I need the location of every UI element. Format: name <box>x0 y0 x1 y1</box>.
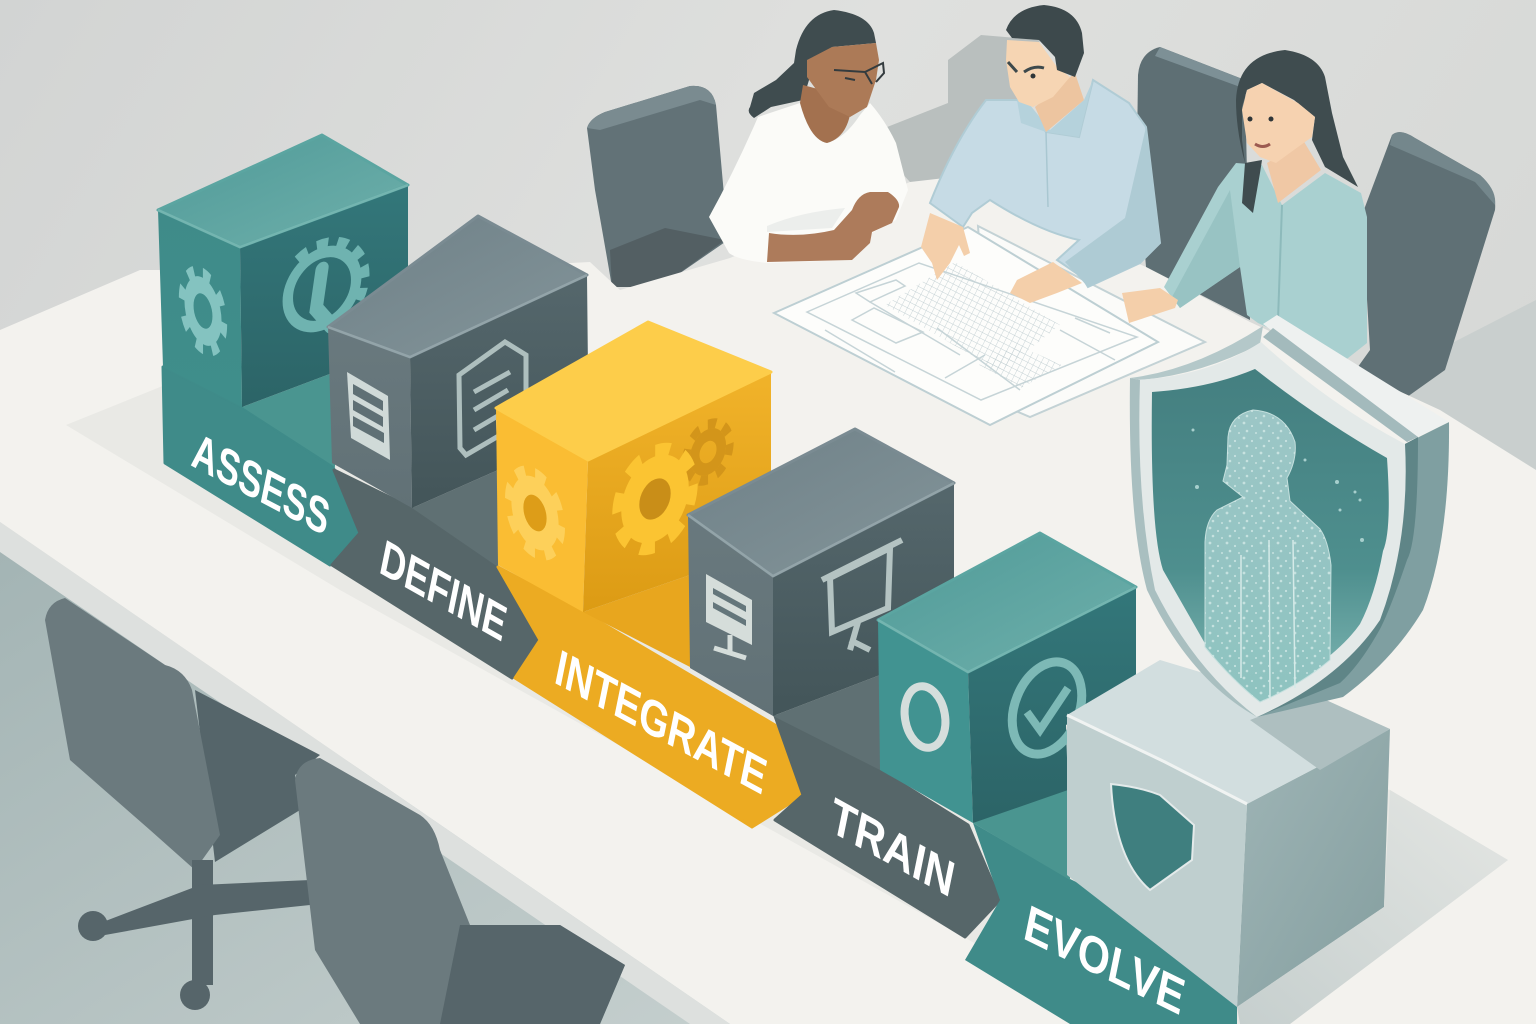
base label <box>332 470 540 678</box>
person: woman with glasses <box>709 10 908 263</box>
person: man in blue shirt <box>921 5 1160 303</box>
shadow on table right of pedestal <box>1237 790 1508 1024</box>
base label <box>163 367 360 565</box>
face <box>1006 40 1070 107</box>
icon: presentation board <box>822 540 902 650</box>
chair: behind man and woman <box>1137 47 1250 320</box>
label: train: TRAIN <box>826 788 959 909</box>
silver pedestal block <box>1067 660 1390 1007</box>
person: woman with long hair <box>1122 50 1367 362</box>
neck <box>1035 73 1084 132</box>
shield with person <box>1130 315 1449 717</box>
neck <box>1267 140 1321 203</box>
label: define: DEFINE <box>376 530 511 653</box>
chair: far right <box>1350 132 1495 402</box>
step 3: integrate block <box>496 322 803 827</box>
floor lower left <box>0 540 760 1024</box>
shirt <box>930 80 1160 287</box>
icon: ring <box>900 683 950 751</box>
table front edge <box>0 522 730 1024</box>
shadow under blocks <box>66 385 1508 1024</box>
shield front <box>1132 342 1406 717</box>
hair back <box>1236 50 1358 213</box>
white sweater <box>709 103 908 263</box>
step 2: define block <box>328 216 588 678</box>
chair: foreground center <box>295 758 625 1024</box>
label: assess: ASSESS <box>188 423 334 547</box>
icon: list <box>347 372 390 460</box>
step 1: assess block <box>158 135 408 565</box>
icon: shield cutout <box>1111 784 1194 890</box>
shield inner panel <box>1152 369 1389 702</box>
base label <box>775 716 1000 937</box>
step 4: train block <box>688 429 1000 937</box>
glasses <box>834 63 884 84</box>
icon: small gear <box>182 262 224 360</box>
icon: monitor list <box>706 574 752 658</box>
label: integrate: INTEGRATE <box>551 640 771 806</box>
blueprints <box>774 226 1205 425</box>
floor right <box>1380 300 1536 480</box>
hand <box>1122 288 1178 323</box>
icon: check circle <box>999 652 1095 764</box>
sparkle texture <box>1192 428 1364 542</box>
shirt <box>1164 163 1367 362</box>
chair: back left <box>587 86 728 287</box>
hair <box>749 10 876 118</box>
face <box>807 43 879 117</box>
icon: small gear <box>509 460 561 566</box>
icon: large gear <box>262 208 382 370</box>
hands <box>921 213 1082 303</box>
hair <box>1006 5 1084 77</box>
collar <box>1017 80 1093 137</box>
neck and chest <box>800 85 850 143</box>
eyes and mouth <box>1248 116 1274 122</box>
base label <box>498 567 803 827</box>
brows and eye <box>1008 62 1044 78</box>
arm and hands <box>767 192 899 262</box>
wall shadow behind man <box>887 35 1040 182</box>
chair: foreground left <box>45 598 320 1010</box>
top bevel <box>1263 315 1449 438</box>
base label <box>965 823 1237 1024</box>
person silhouette <box>1205 410 1331 702</box>
shield side <box>1257 422 1449 717</box>
icon: large gears <box>617 416 730 561</box>
icon: document <box>459 342 526 455</box>
face <box>1242 83 1315 163</box>
step 5: evolve block <box>878 533 1237 1024</box>
body lines <box>1241 540 1295 700</box>
notch floor <box>242 372 335 467</box>
